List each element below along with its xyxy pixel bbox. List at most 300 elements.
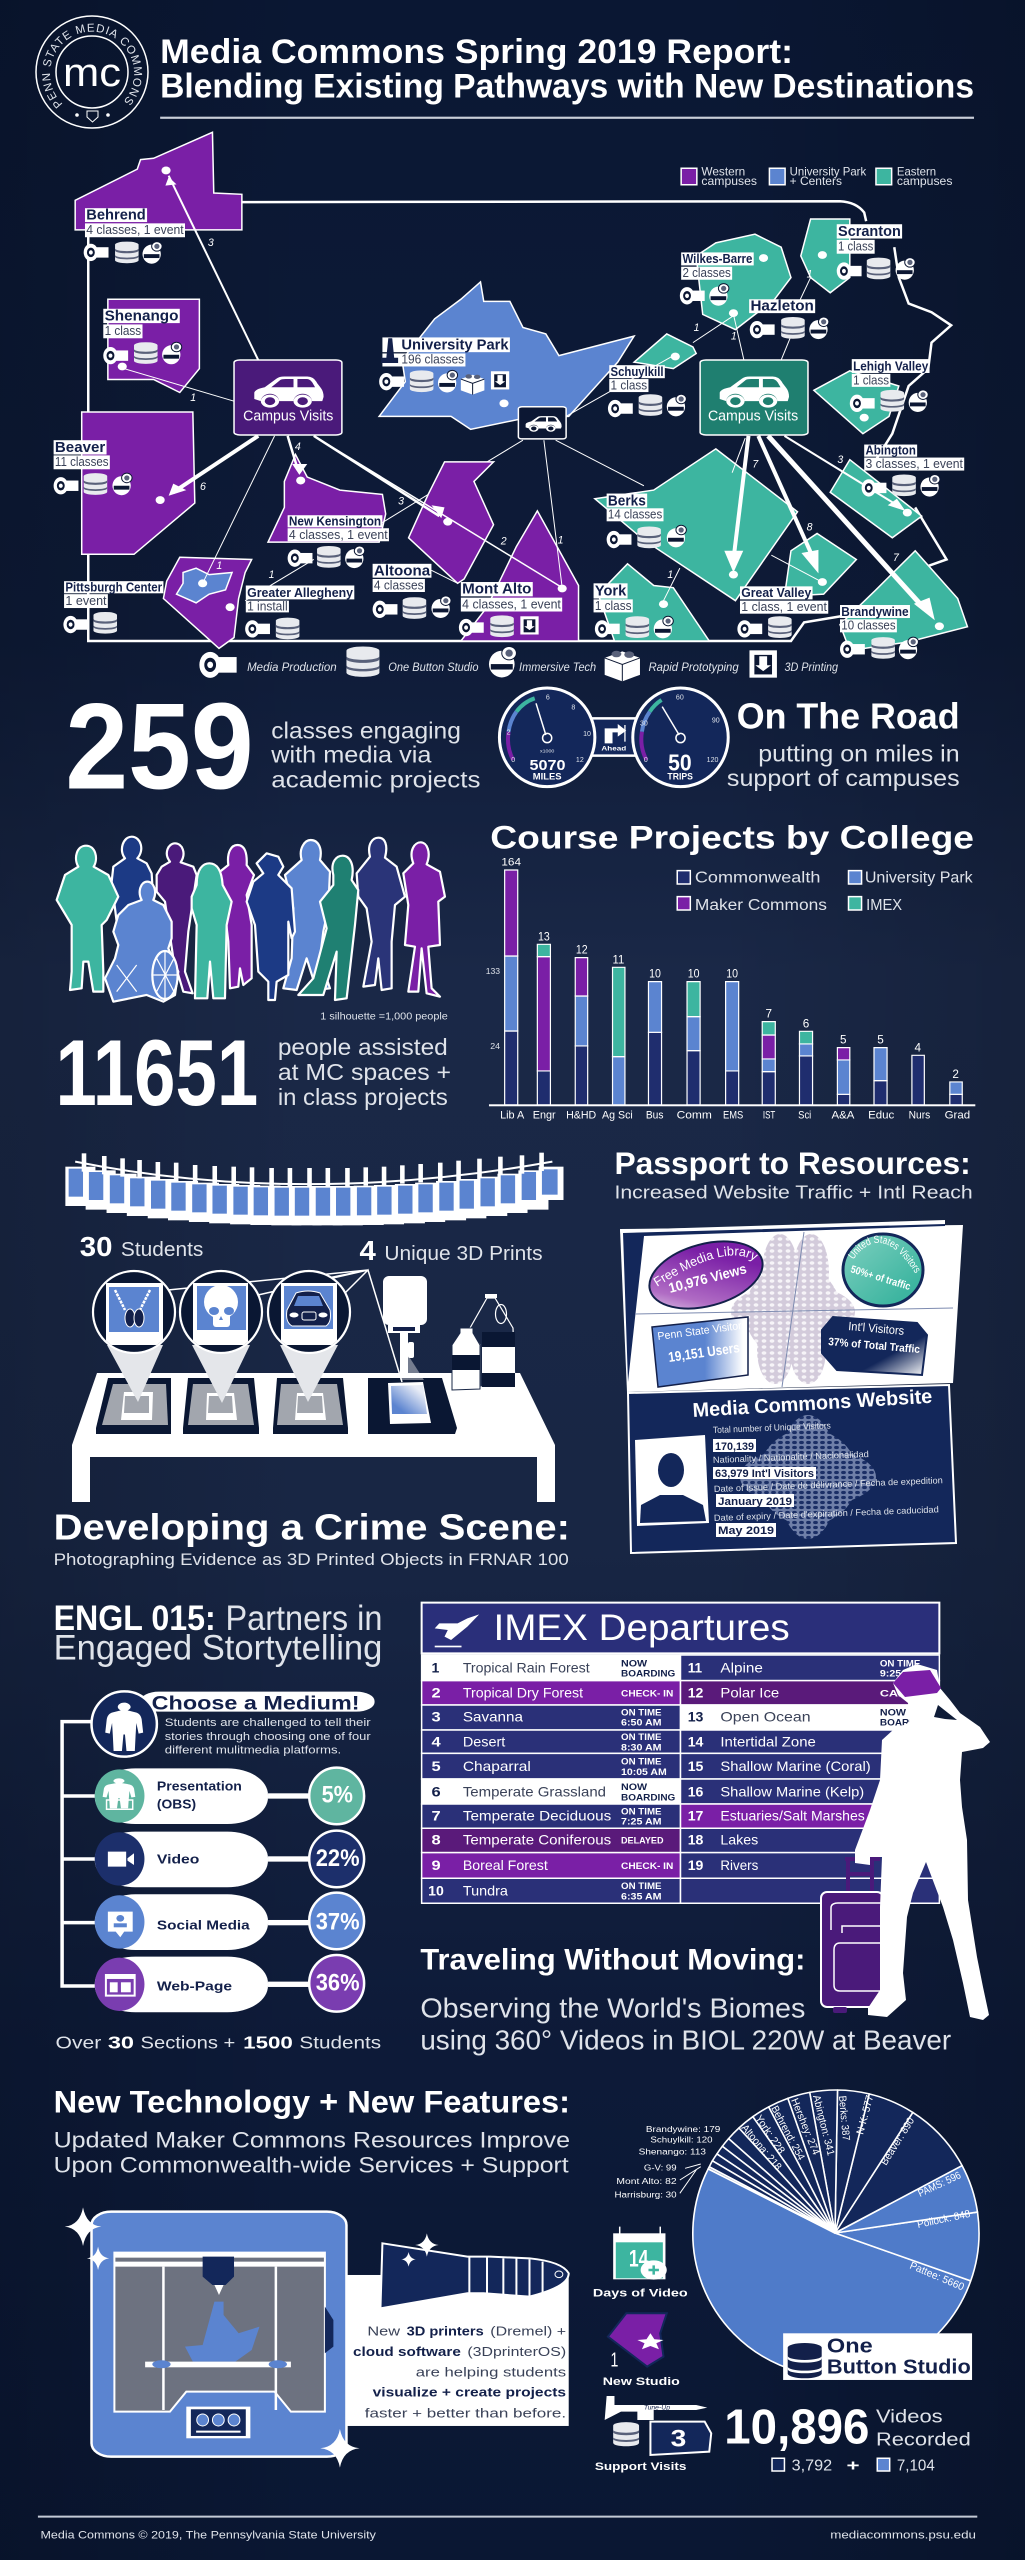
state outline road	[88, 201, 951, 641]
board left column text: Tundra	[463, 1882, 509, 1899]
icon legend: One Button Studio	[388, 661, 479, 674]
stacked bar chart: 11	[613, 952, 624, 966]
stat: 3 support visits: Support Visits	[595, 2460, 687, 2473]
route counts: 1	[269, 569, 275, 581]
gauges: miles and trips: 120	[707, 756, 718, 764]
gauges: miles and trips: TRIPS	[667, 772, 693, 782]
pie leader labels: Brandywine: 179	[646, 2124, 720, 2134]
pie slice labels: Pollock: 848	[916, 2208, 972, 2231]
choose a medium callout: Students are challenged to tell their	[165, 1716, 371, 1729]
board right column text: Shallow Marine (Kelp)	[720, 1783, 864, 1800]
map legend	[681, 165, 952, 188]
choose a medium callout: stories through choosing one of four	[165, 1730, 371, 1743]
passport id page: Date of expiry / Date d'expiration / Fecha de caducidad	[714, 1504, 939, 1523]
oval: free media library: 10,976 Views	[667, 1260, 748, 1296]
option: web-page 36%: 36%	[316, 1969, 360, 1996]
board left column text: ON TIME	[621, 1708, 662, 1718]
traveler with suitcase and VR headset	[821, 1664, 990, 2020]
section: ENGL 015 and IMEX: Partners in	[226, 1599, 382, 1638]
heading: New Technology: Upon Commonwealth-wide Services + Support	[54, 2153, 569, 2178]
icon: light brush tool	[380, 2243, 569, 2308]
board left column text: Savanna	[463, 1709, 524, 1725]
stat: 10,896 videos recorded: 7,104	[897, 2457, 935, 2474]
stat: 10,896 videos recorded: +	[847, 2457, 860, 2474]
stat: 1 new studio: 1	[611, 2348, 618, 2371]
stacked bar chart: Sci	[798, 1109, 811, 1121]
board left column text: 5	[431, 1758, 441, 1774]
campus label: Lehigh Valley: 1 class	[853, 373, 889, 387]
campus label: Shenango: 1 class	[105, 324, 141, 338]
board left column text: 10:05 AM	[621, 1767, 667, 1778]
route counts: 1	[558, 534, 563, 547]
campus label: Lehigh Valley: Lehigh Valley	[853, 359, 929, 374]
departures board	[422, 1603, 939, 1903]
stacked bar chart: 13	[538, 929, 550, 943]
stacked bar chart: 24	[490, 1041, 500, 1051]
stat: 11651 people: 11651	[56, 1020, 258, 1125]
stat: 10,896 videos recorded: 3,792	[792, 2457, 832, 2474]
campus label: Beaver: 11 classes	[55, 454, 109, 469]
stamp: international visitors	[822, 1317, 927, 1375]
campus label: Mont Alto: 4 classes, 1 event	[462, 597, 561, 612]
board left column text: 3	[431, 1709, 441, 1725]
passport id page: 63,979 Int'l Visitors	[715, 1468, 814, 1480]
stacked bar chart: H&HD	[566, 1109, 596, 1121]
heading: ENGL 015: Engaged Stortytelling	[54, 1628, 382, 1667]
stacked bar chart: Grad	[945, 1109, 970, 1121]
choose a medium callout	[92, 1691, 375, 1757]
campus label: Pittsburgh Center: Pittsburgh Center	[65, 581, 163, 595]
icon legend: Rapid Prototyping	[648, 661, 739, 674]
pie slice labels: Hershey: 274	[788, 2097, 822, 2157]
label: 30 students: Students	[121, 1238, 203, 1260]
board right column text: 11	[688, 1660, 702, 1676]
stacked bar chart: Engr	[533, 1109, 556, 1121]
stat: 14 days of video: 14	[629, 2245, 649, 2272]
stat: 10,896 videos recorded	[724, 2400, 971, 2474]
section: crime scene and passport	[54, 1146, 973, 1569]
option: presentation 5%: Presentation	[157, 1779, 242, 1794]
campus label: Abington	[864, 444, 964, 471]
university park car box	[518, 407, 566, 439]
campus label: Berks	[607, 492, 664, 522]
campus label: University Park: 196 classes	[401, 352, 464, 367]
stat: 10,896 videos recorded: Videos	[876, 2407, 943, 2427]
stat: 1 new studio	[603, 2313, 680, 2388]
board left column text: Tropical Dry Forest	[463, 1684, 583, 1701]
board right column text	[688, 1659, 934, 1873]
eastern campus visits box: Campus Visits	[708, 407, 798, 424]
footer: Media Commons © 2019, The Pennsylvania State University	[41, 2529, 376, 2541]
stacked bar chart: Lib A	[500, 1109, 525, 1121]
map legend: + Centers	[790, 175, 842, 188]
board left column text: 4	[431, 1733, 441, 1750]
campus label: Brandywine	[840, 605, 910, 633]
heading: New Technology: Updated Maker Commons Resources Improve	[54, 2128, 570, 2152]
board right column text: Shallow Marine (Coral)	[720, 1758, 871, 1774]
gauges: miles and trips: 2	[507, 729, 511, 737]
board right column text: Intertidal Zone	[720, 1733, 816, 1750]
board right column text: 9:25 AM	[880, 1669, 920, 1679]
campus label: Beaver	[54, 439, 110, 469]
campus label: Beaver: Beaver	[55, 439, 105, 455]
summary: sections and students: Sections +	[141, 2033, 235, 2052]
board right column text: Open Ocean	[720, 1709, 811, 1725]
passport id page: January 2019	[718, 1496, 792, 1508]
summary: sections and students: 30	[108, 2033, 134, 2052]
heading: Developing a Crime Scene	[54, 1507, 570, 1569]
gauges: miles and trips: 0	[511, 756, 515, 764]
campus label: Shenango	[103, 307, 180, 338]
campus label: New Kensington: 4 classes, 1 event	[289, 527, 388, 542]
stacked bar chart: 7	[765, 1007, 772, 1020]
stamp: international visitors: Int'l Visitors	[848, 1319, 905, 1338]
campus label: Great Valley	[740, 585, 828, 614]
callout: printers and cloud software: cloud software	[353, 2344, 461, 2359]
route counts: 7	[752, 458, 759, 471]
board right column text: Rivers	[720, 1857, 758, 1873]
chart legend	[677, 869, 973, 914]
board left column text: Temperate Deciduous	[463, 1808, 611, 1824]
pie slice labels: Altoona: 218	[739, 2122, 784, 2173]
board right column text: Estuaries/Salt Marshes	[720, 1808, 865, 1824]
oval: united states visitors: United States Visitors	[848, 1236, 920, 1273]
pie slice labels: Pattee: 5660	[908, 2260, 966, 2293]
pie leader labels: Schuylkill: 120	[650, 2135, 713, 2145]
callout: printers and cloud software: New	[367, 2324, 401, 2339]
route counts: 3	[208, 237, 214, 249]
board right column text: 12	[688, 1684, 703, 1701]
stat: 11651 people: people assisted	[278, 1034, 448, 1060]
stacked bar chart	[486, 855, 975, 1121]
western campus visits box: Campus Visits	[243, 407, 333, 424]
gauges: miles and trips	[499, 688, 728, 787]
stacked bar chart: 2	[952, 1067, 959, 1081]
stat: 259 classes: 259	[65, 678, 254, 815]
passport id page	[635, 1386, 943, 1537]
gauges: miles and trips: 5070	[529, 756, 565, 773]
board left column text: 7:25 AM	[621, 1817, 662, 1827]
gauges: miles and trips: 30	[640, 720, 648, 727]
choose a medium callout: different mulitmedia platforms.	[165, 1744, 341, 1756]
option: social media 37%: 37%	[316, 1907, 360, 1934]
board right column text: BOARDING	[880, 1718, 934, 1728]
route counts: 1	[216, 560, 222, 572]
board right column text: CANCEL	[880, 1689, 932, 1699]
board left column text: 8:30 AM	[621, 1743, 662, 1753]
card: penn state visitors: Penn State Visitors	[657, 1319, 748, 1343]
board right column text: 13	[688, 1709, 703, 1725]
option: web-page 36%: Web-Page	[157, 1979, 232, 1994]
stacked bar chart: 6	[803, 1016, 809, 1030]
board left column text: ON TIME	[621, 1881, 662, 1892]
stacked bar chart: 10	[688, 967, 699, 980]
board left column text: ON TIME	[621, 1732, 662, 1743]
label: One Button Studio	[783, 2333, 972, 2380]
board left column text: Tropical Rain Forest	[463, 1660, 590, 1676]
stamp: international visitors: 37% of Total Traffic	[828, 1336, 920, 1356]
pictogram: people silhouettes	[57, 837, 445, 1002]
icon legend: Immersive Tech	[519, 661, 596, 674]
section: video stats and footer	[38, 2227, 977, 2541]
media options connector	[62, 1722, 95, 1986]
card: penn state visitors: 19,151 Users	[667, 1339, 741, 1365]
stacked bar chart: 4	[915, 1040, 921, 1054]
chemical bottles	[452, 1294, 515, 1390]
gauges: miles and trips: x1000	[540, 748, 554, 754]
stacked bar chart: EMS	[723, 1109, 743, 1121]
campus label: Berks: 14 classes	[608, 507, 662, 522]
campus label: Wilkes-Barre	[681, 252, 754, 280]
pie leader labels: Harrisburg: 30	[614, 2190, 677, 2199]
passport graphic	[620, 1220, 963, 1554]
pie leader labels: G-V: 99	[644, 2163, 677, 2173]
campus label: Scranton: 1 class	[838, 239, 873, 254]
board left column text: 2	[431, 1684, 441, 1701]
logo: Penn State Media Commons seal: mc	[63, 51, 121, 95]
icon: car front	[287, 1291, 330, 1326]
card: penn state visitors	[652, 1317, 748, 1387]
sparkles	[65, 2207, 439, 2468]
stat: 259 classes: with media via	[271, 742, 432, 768]
campus label: Greater Allegheny: 1 install	[247, 599, 288, 614]
route counts: 1	[731, 330, 737, 343]
heading: Developing a Crime Scene: Photographing Evidence as 3D Printed Objects in FRNAR 100	[54, 1551, 569, 1569]
stat: 3 support visits: Tune-Up	[644, 2404, 670, 2411]
campus label: Mont Alto	[461, 580, 562, 612]
campus label: Shenango: Shenango	[105, 307, 178, 324]
map legend: Eastern	[897, 165, 936, 179]
photographs on a clothesline	[65, 1153, 563, 1225]
board left column text: CHECK- IN	[621, 1689, 673, 1699]
option: social media 37%: Social Media	[157, 1918, 250, 1933]
eastern campus visits box	[700, 360, 808, 435]
map legend: campuses	[897, 175, 952, 188]
heading: On The Road	[727, 696, 960, 791]
option: video 22%	[95, 1831, 364, 1887]
campus label: Altoona: Altoona	[374, 562, 431, 579]
stacked bar chart: 10	[726, 967, 738, 980]
stat: 259 classes: classes engaging	[271, 718, 461, 743]
board left column text: Temperate Coniferous	[463, 1832, 611, 1848]
campus label: Great Valley: 1 class, 1 event	[741, 599, 827, 614]
board right column text: NOW	[880, 1708, 906, 1718]
pie slice labels: N-K: 577	[854, 2094, 876, 2136]
campus label: Abington: 3 classes, 1 event	[865, 456, 963, 471]
stacked bar chart: IST	[763, 1109, 776, 1121]
gauges: miles and trips: 50	[668, 751, 692, 776]
map legend: campuses	[701, 175, 757, 188]
label: 4 unique 3D prints: Unique 3D Prints	[384, 1242, 543, 1264]
option: presentation 5%: 5%	[322, 1781, 353, 1808]
stacked bar chart: 12	[576, 943, 588, 956]
board right column text: Alpine	[720, 1660, 763, 1676]
board left column text: Boreal Forest	[463, 1857, 548, 1873]
route counts: 7	[893, 551, 900, 564]
gauges: miles and trips: 0	[644, 756, 648, 764]
campus shapes	[75, 132, 967, 651]
label: 4 unique 3D prints: 4	[360, 1236, 376, 1266]
campus label: York: York	[595, 582, 627, 599]
stacked bar chart: Bus	[646, 1109, 664, 1121]
passport id page: Nationality / Nationalité / Nacionalidad	[713, 1449, 869, 1465]
board left column text: 7	[431, 1808, 441, 1824]
icon legend: 3D Printing	[784, 661, 838, 674]
pictogram note: 1 silhouette =1,000 people	[320, 1011, 448, 1022]
section: header and campus map	[54, 32, 974, 681]
callout: printers and cloud software: (3DprinterOS)	[467, 2344, 566, 2359]
campus label: Pittsburgh Center	[64, 581, 163, 608]
campus label: Mont Alto: Mont Alto	[462, 580, 531, 597]
campus label: Great Valley: Great Valley	[741, 585, 812, 600]
label: 30 students: 30	[80, 1232, 112, 1262]
pie slice labels: Behrend: 254	[768, 2104, 807, 2163]
gauges: miles and trips: 12	[576, 756, 584, 764]
chart legend: IMEX	[866, 896, 902, 914]
pie slice labels: York: 228	[753, 2113, 787, 2156]
board row backgrounds	[422, 1655, 939, 1903]
campus label: Schuylkill	[609, 364, 665, 393]
gauges: miles and trips: Ahead	[601, 746, 627, 752]
board left column text	[428, 1659, 675, 1902]
board left column text: Chaparral	[463, 1758, 531, 1774]
callout: printers and cloud software: 3D printers	[407, 2324, 484, 2339]
board right column text: 18	[688, 1832, 703, 1848]
board left column text: 9	[431, 1857, 441, 1873]
pie slice labels: Berks: 387	[836, 2095, 852, 2141]
board right column text: 19	[688, 1857, 703, 1873]
logo: Penn State Media Commons seal: PENN STATE MEDIA COMMONS	[42, 24, 142, 109]
campus label: Lehigh Valley	[852, 359, 930, 387]
campus label: Altoona	[373, 562, 431, 593]
board left column text: BOARDING	[621, 1669, 675, 1679]
footer	[41, 2529, 976, 2541]
board left column text: Desert	[463, 1733, 505, 1750]
stat: 3 support visits: 3	[671, 2425, 686, 2452]
illustration: 3D printer	[92, 2212, 346, 2457]
route counts: 2	[500, 535, 507, 548]
campus label: Hazleton: Hazleton	[750, 297, 814, 314]
enlarger	[383, 1276, 427, 1380]
stacked bar chart: 133	[486, 966, 500, 976]
icon: dog tags	[115, 1290, 150, 1327]
callout: printers and cloud software: (Dremel) +	[490, 2324, 566, 2339]
pie slice labels: PAMS: 596	[916, 2169, 963, 2200]
option: video 22%: Video	[157, 1852, 199, 1867]
board right column text: 16	[688, 1783, 703, 1800]
board header	[422, 1603, 939, 1653]
board left column text: 10	[428, 1882, 444, 1899]
magnified 3D print lenses	[93, 1270, 402, 1403]
heading: Developing a Crime Scene: Developing a Crime Scene:	[54, 1507, 570, 1547]
map legend: University Park	[790, 165, 867, 179]
gauges: miles and trips: 8	[571, 704, 575, 711]
campus label: Scranton: Scranton	[838, 223, 901, 239]
board left column text: 8	[431, 1832, 441, 1848]
option: presentation 5%	[95, 1768, 364, 1824]
icon legend	[199, 646, 838, 681]
route counts: 1	[190, 392, 196, 404]
stacked bar chart: 5	[877, 1033, 884, 1046]
callout: printers and cloud software: faster + better than before.	[365, 2406, 566, 2421]
stacked bar chart: A&A	[832, 1109, 855, 1121]
title	[160, 32, 974, 105]
route counts: 3	[398, 495, 404, 508]
board right column text: 14	[688, 1733, 703, 1750]
label: One Button Studio: One	[827, 2334, 873, 2357]
board left column text: BOARDING	[621, 1793, 675, 1803]
campus label: Greater Allegheny	[246, 585, 354, 614]
stat: 11651 people: at MC spaces +	[278, 1059, 451, 1085]
pie leader labels	[614, 2124, 720, 2199]
icon legend: Media Production	[247, 661, 337, 674]
stacked bar chart: Ag Sci	[602, 1109, 633, 1121]
stat: 11651 people: in class projects	[278, 1084, 448, 1110]
route counts	[190, 237, 900, 581]
route counts: 1	[807, 268, 813, 281]
logo: Penn State Media Commons seal	[35, 15, 149, 129]
stacked bar chart: Nurs	[909, 1109, 930, 1121]
summary: sections and students: Students	[299, 2033, 381, 2052]
campus label: York	[594, 582, 633, 613]
campus label: Greater Allegheny: Greater Allegheny	[247, 585, 354, 600]
board left column text: ON TIME	[621, 1757, 662, 1767]
campus label: New Kensington	[288, 515, 389, 542]
gauges: miles and trips: 10	[583, 730, 591, 738]
choose a medium callout: Choose a Medium!	[152, 1693, 360, 1714]
stacked bar chart: Educ	[868, 1109, 895, 1121]
oval: united states visitors: 50%+ of traffic	[849, 1263, 912, 1293]
campus resource icons	[54, 242, 940, 659]
passport id page: Date of Issue / Date de délivrance / Fecha de expedition	[714, 1475, 943, 1494]
label: 30 students	[80, 1232, 203, 1262]
callout: printers and cloud software: visualize + create projects	[373, 2385, 566, 2400]
option: web-page 36%	[95, 1955, 364, 2012]
passport id page: 170,139	[715, 1441, 754, 1453]
stacked bar chart: 5	[840, 1033, 847, 1046]
campus label: Berks: Berks	[608, 492, 646, 508]
campus label: Behrend: 4 classes, 1 event	[86, 222, 184, 237]
campus label: University Park	[381, 336, 510, 367]
gauges: miles and trips: 90	[712, 717, 720, 725]
stacked bar chart: 10	[649, 967, 661, 980]
summary: sections and students	[56, 2033, 381, 2052]
campus label: Brandywine: 10 classes	[841, 618, 896, 633]
campus label: Wilkes-Barre: Wilkes-Barre	[682, 252, 752, 266]
section: ENGL 015 and IMEX	[54, 1599, 951, 2056]
gauges: miles and trips: 60	[676, 694, 684, 701]
route counts: 1	[667, 569, 673, 581]
board left column text: DELAYED	[621, 1836, 664, 1846]
board right column text: Lakes	[720, 1832, 758, 1848]
campus label: Altoona: 4 classes	[374, 578, 424, 593]
gauges: miles and trips: MILES	[533, 772, 562, 782]
callout: printers and cloud software: are helping students	[416, 2365, 566, 2380]
pie leader labels: Mont Alto: 82	[616, 2176, 677, 2186]
chart legend: Maker Commons	[695, 896, 827, 914]
map legend: Western	[701, 165, 745, 179]
heading: Traveling Without Moving	[420, 1943, 951, 2056]
pie slice labels: Beaver: 890	[878, 2115, 917, 2168]
route counts: 4	[295, 441, 301, 453]
board left column text: 6:50 AM	[621, 1718, 662, 1728]
pie leader labels: Shenango: 113	[639, 2147, 706, 2156]
board left column text: Temperate Grassland	[463, 1783, 606, 1800]
campus label: York: 1 class	[595, 598, 631, 613]
summary: sections and students: 1500	[243, 2033, 293, 2052]
pie slice labels	[739, 2094, 972, 2293]
stat: 14 days of video: Days of Video	[593, 2286, 688, 2299]
